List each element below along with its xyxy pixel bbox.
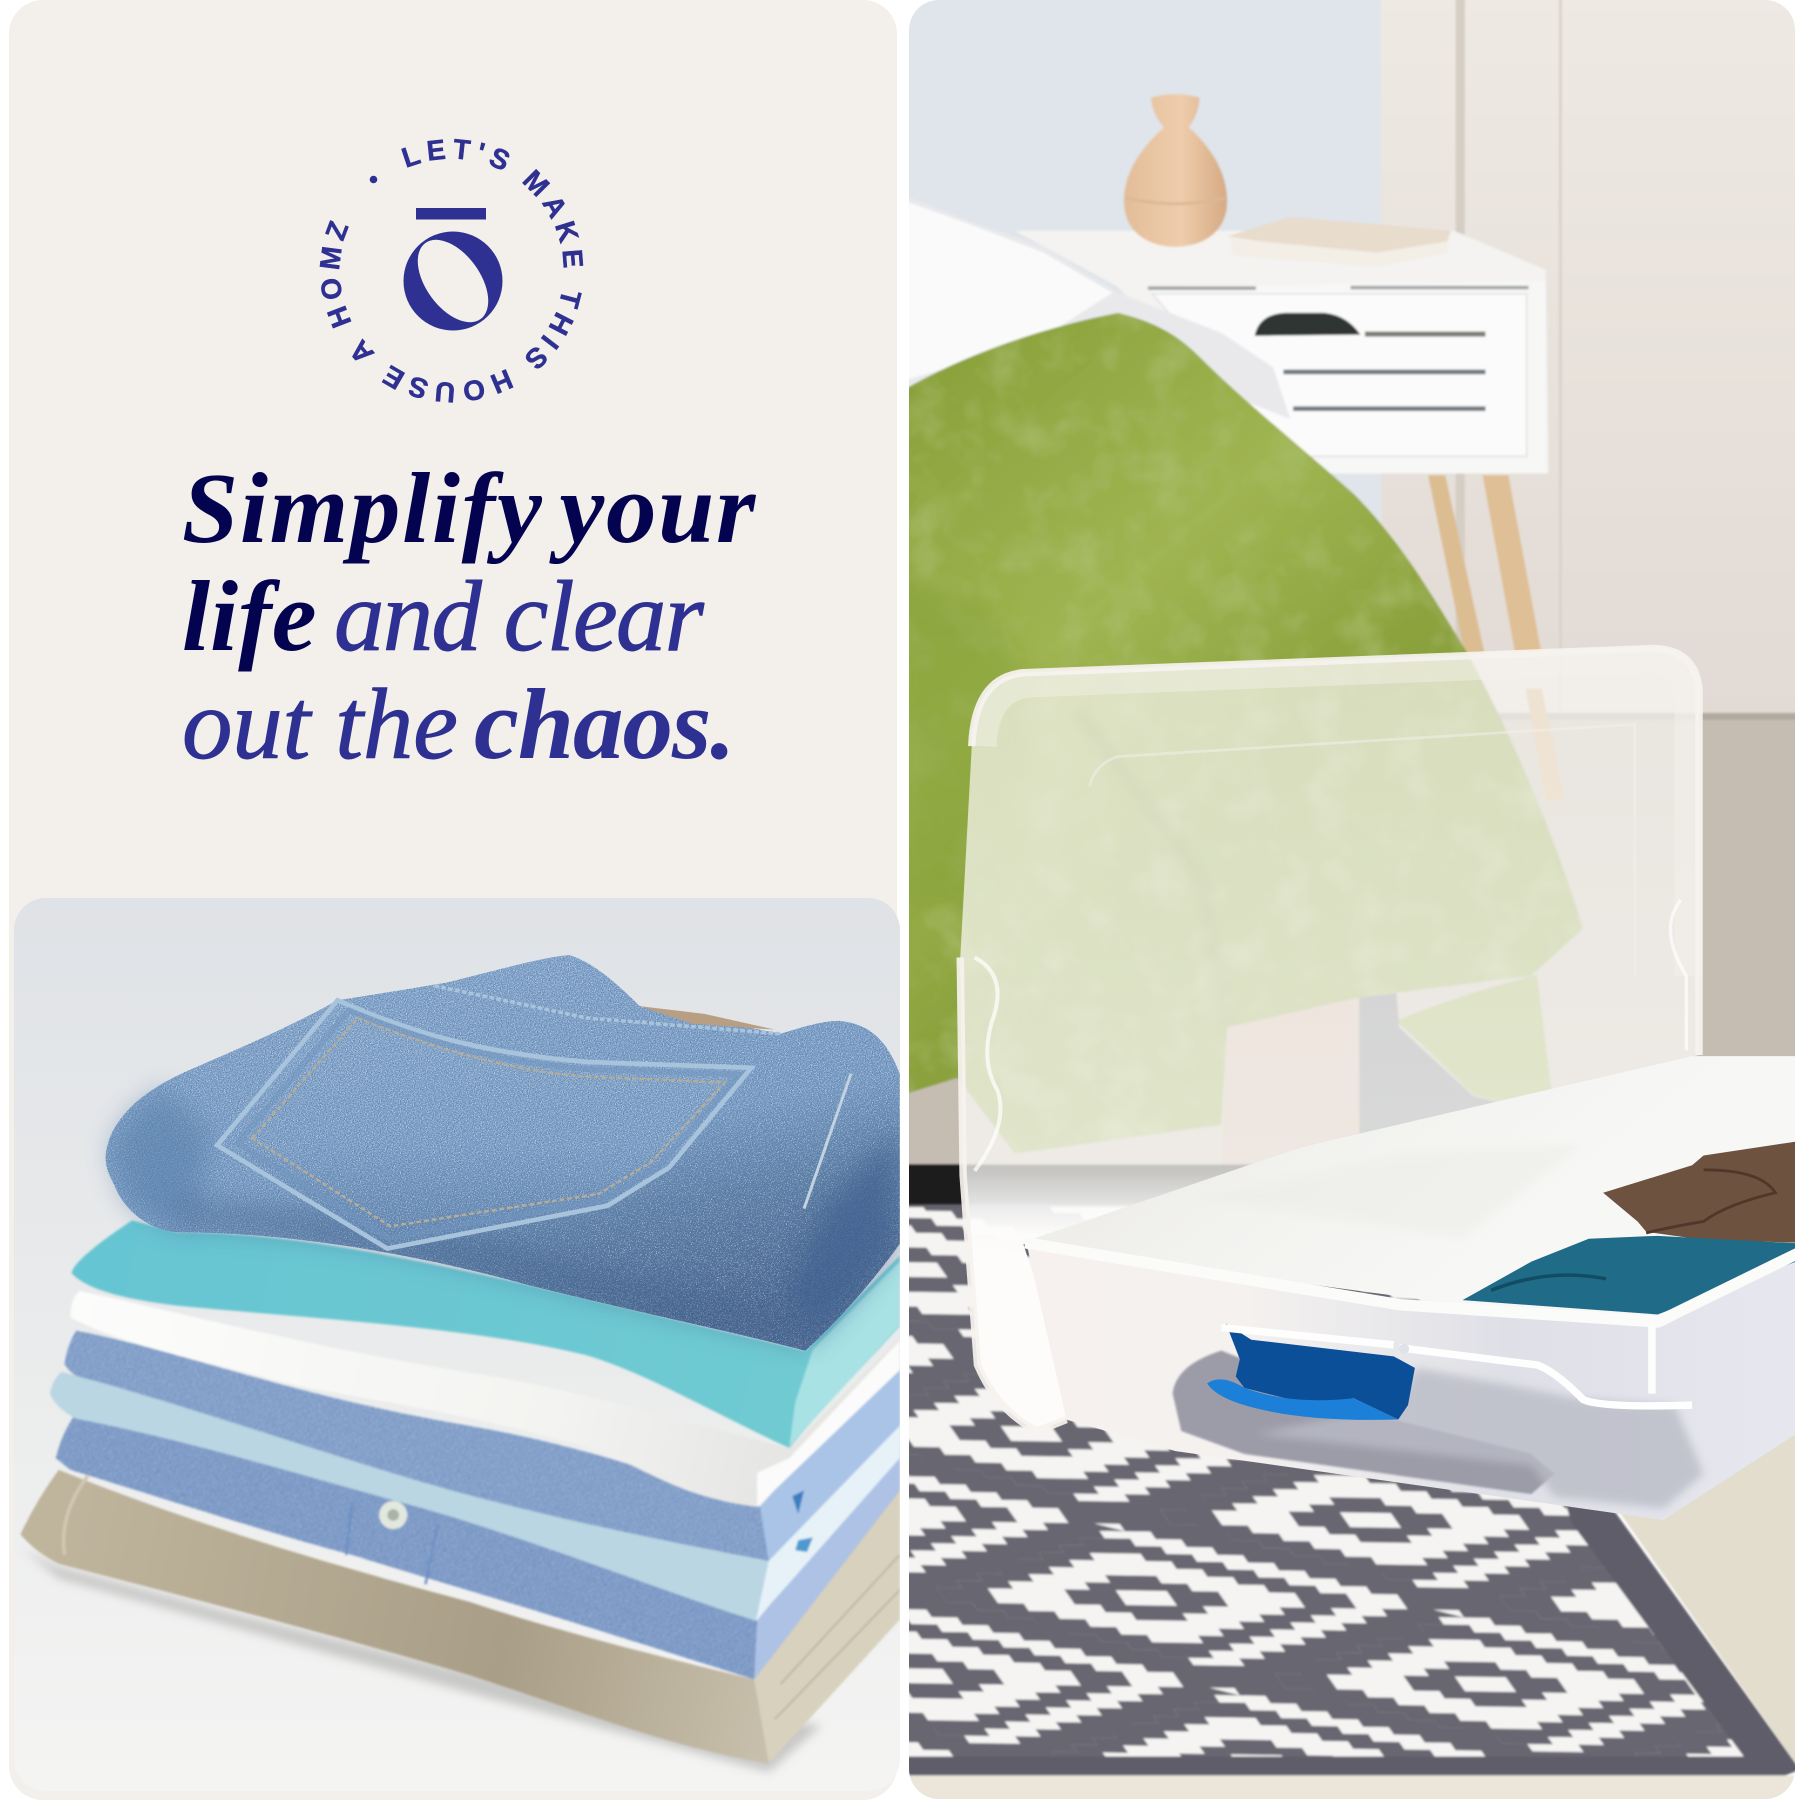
mid blue shirt xyxy=(63,1330,770,1562)
khaki trousers xyxy=(20,1469,769,1764)
headline line 3: chaos. xyxy=(474,668,735,780)
box lid xyxy=(960,649,1699,1431)
white t-shirt xyxy=(70,1291,900,1507)
photo: under-bed storage box in bedroom xyxy=(889,0,1800,1800)
bedroom background xyxy=(889,0,1800,1231)
blue shirt lower xyxy=(54,1416,774,1680)
headline line 2: life xyxy=(182,560,317,672)
blanket fold under lid xyxy=(1078,712,1227,1027)
teal t-shirt xyxy=(72,1220,900,1448)
headline line 3: out the xyxy=(182,668,458,780)
headline line 1: Simplify your xyxy=(182,452,757,564)
green blanket xyxy=(889,313,1583,1154)
brown garment xyxy=(1603,1138,1800,1243)
rug xyxy=(889,1204,1800,1800)
floor xyxy=(889,715,1800,1231)
tray body xyxy=(1027,1244,1800,1520)
back pocket xyxy=(217,1000,751,1249)
logo: circular badge xyxy=(320,138,584,403)
logo ring text: LET'S MAKE THIS HOUSE A HOMZ xyxy=(320,138,584,403)
nightstand legs xyxy=(1428,475,1485,657)
wall xyxy=(909,0,1382,524)
panel: left cream card xyxy=(9,0,897,1800)
pale blue shirt xyxy=(49,1371,770,1620)
vase xyxy=(1124,94,1227,247)
shirt placket and button xyxy=(346,1502,437,1584)
dark floor gap xyxy=(889,1164,1485,1207)
gray contents shadow xyxy=(1173,1351,1554,1494)
nightstand xyxy=(1015,231,1549,474)
floor right of rug xyxy=(1618,1417,1800,1800)
photo: stack of folded clothes xyxy=(14,898,900,1791)
nightstand leg through lid xyxy=(1526,689,1565,801)
teal garment xyxy=(1463,1236,1800,1314)
shadow under clothes xyxy=(23,1549,822,1772)
white latch strap xyxy=(1221,1328,1692,1406)
books xyxy=(1227,217,1451,258)
tray inner rim xyxy=(1025,1056,1800,1326)
blue latch xyxy=(1207,1324,1415,1420)
denim jeans xyxy=(106,955,900,1351)
wardrobe door xyxy=(1381,0,1800,718)
storage tray xyxy=(1025,1056,1800,1520)
pillow xyxy=(889,189,1290,419)
denim shaded ends xyxy=(112,1088,211,1226)
bed base seen through lid xyxy=(1221,998,1359,1165)
headline line 2: and clear xyxy=(334,560,705,672)
front rim xyxy=(1025,1243,1800,1322)
waistband stitching and label xyxy=(434,986,781,1034)
title: headline xyxy=(182,452,757,780)
